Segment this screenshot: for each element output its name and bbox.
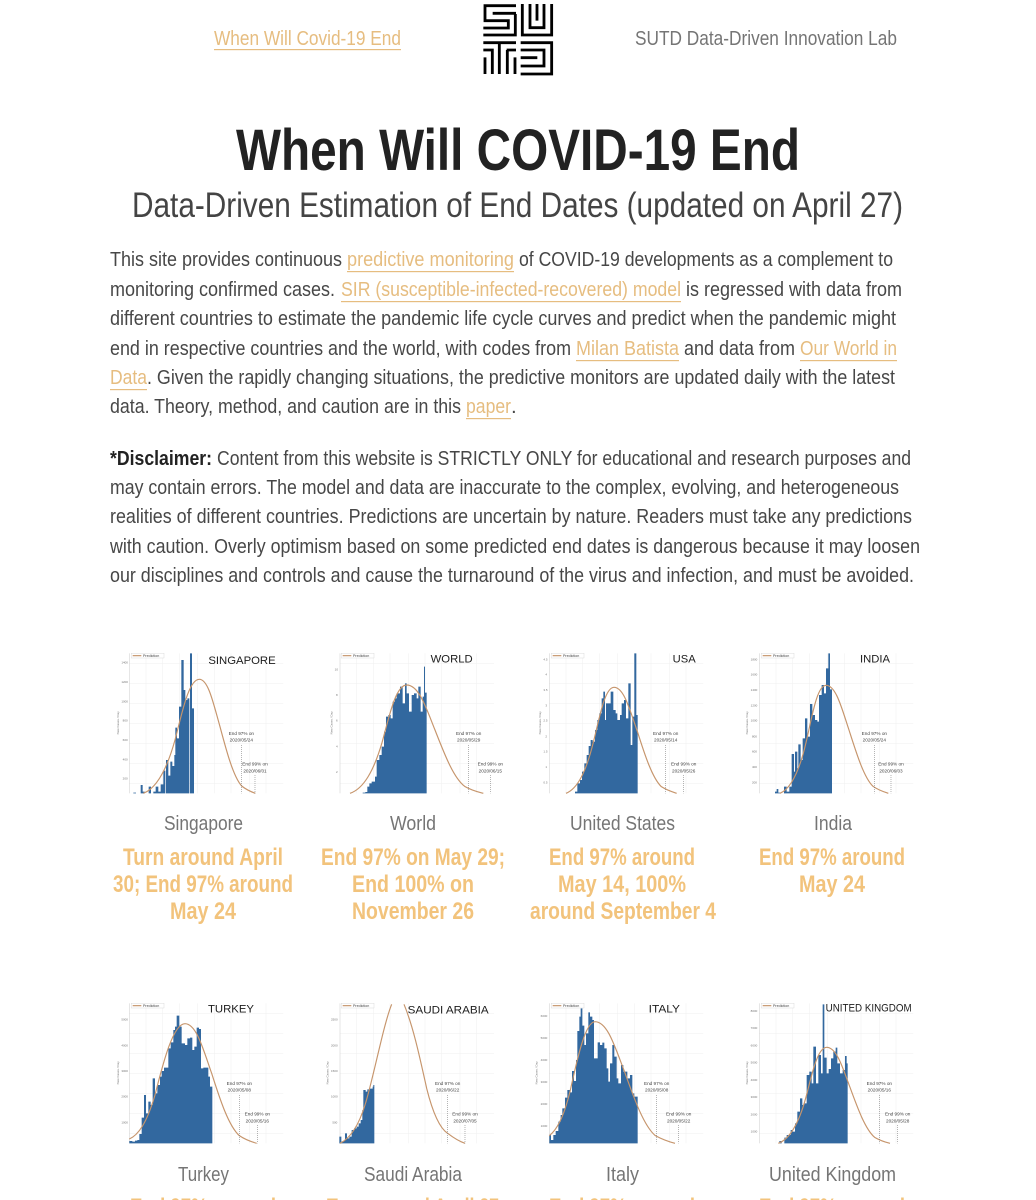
- chart: Turkey: 2020/05/16: [246, 1118, 269, 1123]
- label: World: World: [390, 812, 436, 835]
- chart: USA: 0.5: [543, 781, 548, 785]
- chart: United Kingdom: 2020/05/16: [868, 1088, 891, 1093]
- outcome: India: End 97% around: [759, 844, 905, 871]
- text block: introduction: [110, 248, 902, 419]
- label: Saudi Arabia: Saudi Arabia: [364, 1163, 462, 1186]
- chart: Saudi Arabia: 2500: [331, 1018, 338, 1022]
- chart: United Kingdom: 3000: [751, 1095, 758, 1099]
- outcome: United States: around September 4: [530, 898, 717, 925]
- text block: disclaimer: our disciplines and controls and cause the turnaround of the virus and infection, and must be avoided.: [110, 564, 914, 587]
- chart: USA: End 99% on: [671, 762, 697, 767]
- chart: USA: [538, 653, 703, 793]
- chart: World: End 97% on: [456, 731, 482, 736]
- chart: World: 2: [336, 770, 338, 774]
- chart: World: 2020/05/29: [457, 738, 481, 743]
- chart: United Kingdom: 4000: [751, 1078, 758, 1082]
- nav text: SUTD Data-Driven Innovation Lab: SUTD Data-Driven Innovation Lab: [635, 27, 897, 50]
- label: United Kingdom: United Kingdom: [769, 1163, 896, 1186]
- chart: Italy: 2020/05/08: [645, 1088, 669, 1093]
- outcome: Singapore: [113, 844, 293, 925]
- chart: Saudi Arabia: 1500: [331, 1069, 338, 1073]
- text block: introduction: paper: [466, 395, 511, 418]
- chart: Saudi Arabia: End 97% on: [435, 1081, 461, 1086]
- chart: Turkey: End 97% on: [227, 1081, 252, 1086]
- chart: USA: 4: [545, 673, 547, 677]
- outcome: World: End 97% on May 29;: [321, 844, 505, 871]
- chart: USA: 2: [545, 734, 547, 738]
- chart: United Kingdom: End 99% on: [885, 1112, 911, 1117]
- chart: Italy: 2000: [541, 1102, 548, 1106]
- chart: United Kingdom: 2020/05/28: [886, 1118, 910, 1123]
- chart: India: 1000: [751, 719, 758, 723]
- outcome: United States: End 97% around: [549, 844, 695, 871]
- chart: Singapore: 1000: [121, 699, 128, 703]
- chart: Singapore: New Cases / Day: [116, 711, 120, 734]
- text block: disclaimer: realities of different countries. Predictions are uncertain by nature. Readers must take any predictions: [110, 505, 912, 528]
- chart: World: 2020/06/15: [479, 768, 502, 773]
- chart: Turkey: 1000: [121, 1120, 128, 1124]
- chart: Turkey: 2020/05/08: [228, 1088, 251, 1093]
- chart: United Kingdom: 5000: [751, 1061, 758, 1065]
- chart: Singapore: 800: [123, 719, 128, 723]
- chart: USA: Prediction: [563, 654, 579, 658]
- chart: Turkey: 4000: [121, 1043, 128, 1047]
- label: Turkey: Turkey: [178, 1163, 230, 1186]
- chart: USA: 3.5: [543, 688, 548, 692]
- chart: Singapore: 1400: [121, 661, 128, 665]
- outcome: India: [759, 844, 905, 898]
- chart: World: 6: [336, 719, 338, 723]
- icon: SUTD logo: [483, 4, 552, 74]
- text block: introduction: Data: [110, 366, 148, 389]
- text block: introduction: . Given the rapidly changing situations, the predictive monitors are updated daily with the latest: [147, 366, 895, 389]
- chart: USA: 2.5: [543, 719, 548, 723]
- text block: introduction: This site provides continuous: [110, 248, 342, 271]
- text block: introduction: Our World in: [800, 337, 897, 360]
- chart: India: 400: [752, 765, 757, 769]
- text block: introduction: is regressed with data from: [686, 278, 902, 301]
- outcome: Singapore: May 24: [170, 898, 237, 925]
- chart: India: 1800: [751, 657, 758, 661]
- chart: United Kingdom: End 97% on: [867, 1081, 892, 1086]
- text block: introduction: SIR (susceptible-infected-recovered) model: [341, 278, 681, 301]
- chart: Singapore: End 99% on: [242, 762, 268, 767]
- chart: Turkey: [116, 1003, 283, 1143]
- outcome: World: [321, 844, 505, 925]
- chart: India: INDIA: [860, 654, 890, 666]
- chart: Italy: 2020/05/22: [667, 1118, 691, 1123]
- text block: introduction: different countries to estimate the pandemic life cycle curves and predict when the pandemic might: [110, 307, 896, 330]
- chart: Singapore: 400: [123, 757, 128, 761]
- chart: Saudi Arabia: New Cases / Day: [326, 1061, 330, 1084]
- chart: USA: 3: [545, 703, 547, 707]
- text block: introduction: data. Theory, method, and caution are in this: [110, 395, 461, 418]
- chart: Singapore: [116, 653, 283, 793]
- chart: Italy: End 99% on: [666, 1112, 692, 1117]
- outcome: United States: May 14, 100%: [558, 871, 686, 898]
- chart: World: WORLD: [431, 654, 473, 666]
- chart: India: 800: [752, 734, 757, 738]
- chart: Saudi Arabia: SAUDI ARABIA: [408, 1004, 490, 1016]
- chart: India: 2020/06/03: [879, 768, 903, 773]
- outcome: World: End 100% on: [352, 871, 474, 898]
- chart: World: [330, 653, 503, 793]
- chart: USA: 2020/05/14: [654, 738, 678, 743]
- text block: introduction: predictive monitoring: [347, 248, 514, 271]
- chart: United Kingdom: 1000: [751, 1129, 758, 1133]
- chart: World: 4: [336, 744, 338, 748]
- chart: Turkey: 2000: [121, 1095, 128, 1099]
- chart: United Kingdom: 2000: [751, 1112, 758, 1116]
- chart: Turkey: 5000: [121, 1018, 128, 1022]
- chart: Turkey: 3000: [121, 1069, 128, 1073]
- chart: USA: 1.5: [543, 750, 548, 754]
- chart: United Kingdom: Prediction: [773, 1004, 789, 1008]
- chart: Singapore: 2020/06/01: [243, 768, 267, 773]
- chart: USA: New Cases / Day: [538, 711, 542, 734]
- chart: Turkey: New Cases / Day: [116, 1061, 120, 1084]
- chart: Singapore: SINGAPORE: [208, 655, 276, 667]
- text block: introduction: and data from: [684, 337, 795, 360]
- chart: India: [745, 653, 913, 793]
- chart: Saudi Arabia: 2020/07/05: [453, 1118, 477, 1123]
- chart: India: New Cases / Day: [745, 711, 749, 734]
- text block: disclaimer: Content from this website is STRICTLY ONLY for educational and research purposes and: [217, 447, 911, 470]
- chart: USA: End 97% on: [653, 731, 679, 736]
- chart: India: 1200: [751, 703, 758, 707]
- chart: World: Prediction: [353, 654, 369, 658]
- text block: introduction: .: [511, 395, 517, 418]
- chart: Italy: ITALY: [649, 1004, 680, 1016]
- chart: Italy: 5000: [541, 1036, 548, 1040]
- chart: Italy: [535, 1003, 703, 1143]
- chart: Italy: 6000: [541, 1014, 548, 1018]
- text block: disclaimer: with caution. Overly optimism based on some predicted end dates is dangerous because it may loosen: [109, 535, 920, 558]
- chart: World: 8: [336, 693, 338, 697]
- chart: Italy: 1000: [541, 1124, 548, 1128]
- chart: USA: 1: [545, 765, 547, 769]
- chart: India: 1400: [751, 688, 758, 692]
- title: When Will COVID-19 End: [236, 118, 800, 183]
- chart: Saudi Arabia: 2000: [331, 1043, 338, 1047]
- chart: USA: USA: [673, 654, 696, 666]
- chart: Italy: End 97% on: [644, 1081, 670, 1086]
- chart: USA: 4.5: [543, 657, 548, 661]
- chart: Saudi Arabia: 500: [332, 1120, 338, 1124]
- chart: Singapore: 600: [123, 738, 128, 742]
- chart: Italy: 4000: [541, 1058, 548, 1062]
- chart: Saudi Arabia: [326, 1003, 494, 1143]
- chart: India: 200: [752, 781, 757, 785]
- text block: disclaimer: may contain errors. The model and data are inaccurate to the complex, evolving, and heterogeneous: [110, 476, 899, 499]
- chart: United Kingdom: [745, 1003, 913, 1143]
- chart: India: Prediction: [773, 654, 789, 658]
- chart: Turkey: Prediction: [143, 1004, 159, 1008]
- chart: India: End 97% on: [862, 731, 887, 736]
- chart: United Kingdom: New Cases / Day: [745, 1061, 749, 1084]
- text block: introduction: end in respective countries and the world, with codes from: [110, 337, 571, 360]
- chart: United Kingdom: UNITED KINGDOM: [826, 1003, 912, 1015]
- chart: Singapore: Prediction: [143, 654, 159, 658]
- text block: disclaimer: [109, 447, 920, 587]
- chart: India: End 99% on: [878, 762, 904, 767]
- chart: India: 2020/05/24: [863, 738, 886, 743]
- chart: Italy: New Cases / Day: [535, 1061, 539, 1084]
- label: Italy: Italy: [606, 1163, 640, 1186]
- chart: Singapore: 2020/05/24: [230, 738, 253, 743]
- chart: Saudi Arabia: End 99% on: [452, 1112, 478, 1117]
- chart: Singapore: 1200: [121, 680, 128, 684]
- outcome: World: November 26: [352, 898, 474, 925]
- chart: Italy: 3000: [541, 1080, 548, 1084]
- chart: Singapore: 200: [123, 777, 128, 781]
- label: United States: United States: [570, 812, 675, 835]
- text block: disclaimer: *Disclaimer:: [110, 447, 212, 470]
- chart: United Kingdom: 6000: [751, 1043, 758, 1047]
- chart: World: End 99% on: [478, 762, 503, 767]
- text block: introduction: of COVID-19 developments as a complement to: [519, 248, 893, 271]
- chart: Saudi Arabia: 2020/06/22: [436, 1088, 460, 1093]
- chart: Singapore: End 97% on: [229, 731, 254, 736]
- chart: Italy: Prediction: [563, 1004, 579, 1008]
- outcome: Singapore: Turn around April: [123, 844, 283, 871]
- nav link: When Will Covid-19 End: When Will Covid-19 End: [214, 27, 401, 50]
- chart: United Kingdom: 8000: [751, 1009, 758, 1013]
- chart: Saudi Arabia: Prediction: [353, 1004, 369, 1008]
- label: Singapore: Singapore: [164, 812, 243, 835]
- text block: introduction: Milan Batista: [576, 337, 680, 360]
- outcome: United States: [530, 844, 717, 925]
- chart: World: 10: [335, 667, 338, 671]
- chart: Saudi Arabia: 1000: [331, 1095, 338, 1099]
- text block: introduction: monitoring confirmed cases.: [110, 278, 335, 301]
- chart: United Kingdom: 7000: [751, 1026, 758, 1030]
- chart: Turkey: End 99% on: [245, 1112, 270, 1117]
- chart: World: New Cases / Day: [330, 711, 334, 734]
- chart: India: 600: [752, 750, 757, 754]
- outcome: Singapore: 30; End 97% around: [113, 871, 293, 898]
- chart: Turkey: TURKEY: [208, 1004, 254, 1016]
- chart: USA: 2020/05/26: [672, 768, 696, 773]
- subtitle: Data-Driven Estimation of End Dates (updated on April 27): [132, 186, 903, 225]
- label: India: India: [814, 812, 852, 835]
- outcome: India: May 24: [799, 871, 866, 898]
- chart: India: 1600: [751, 673, 758, 677]
